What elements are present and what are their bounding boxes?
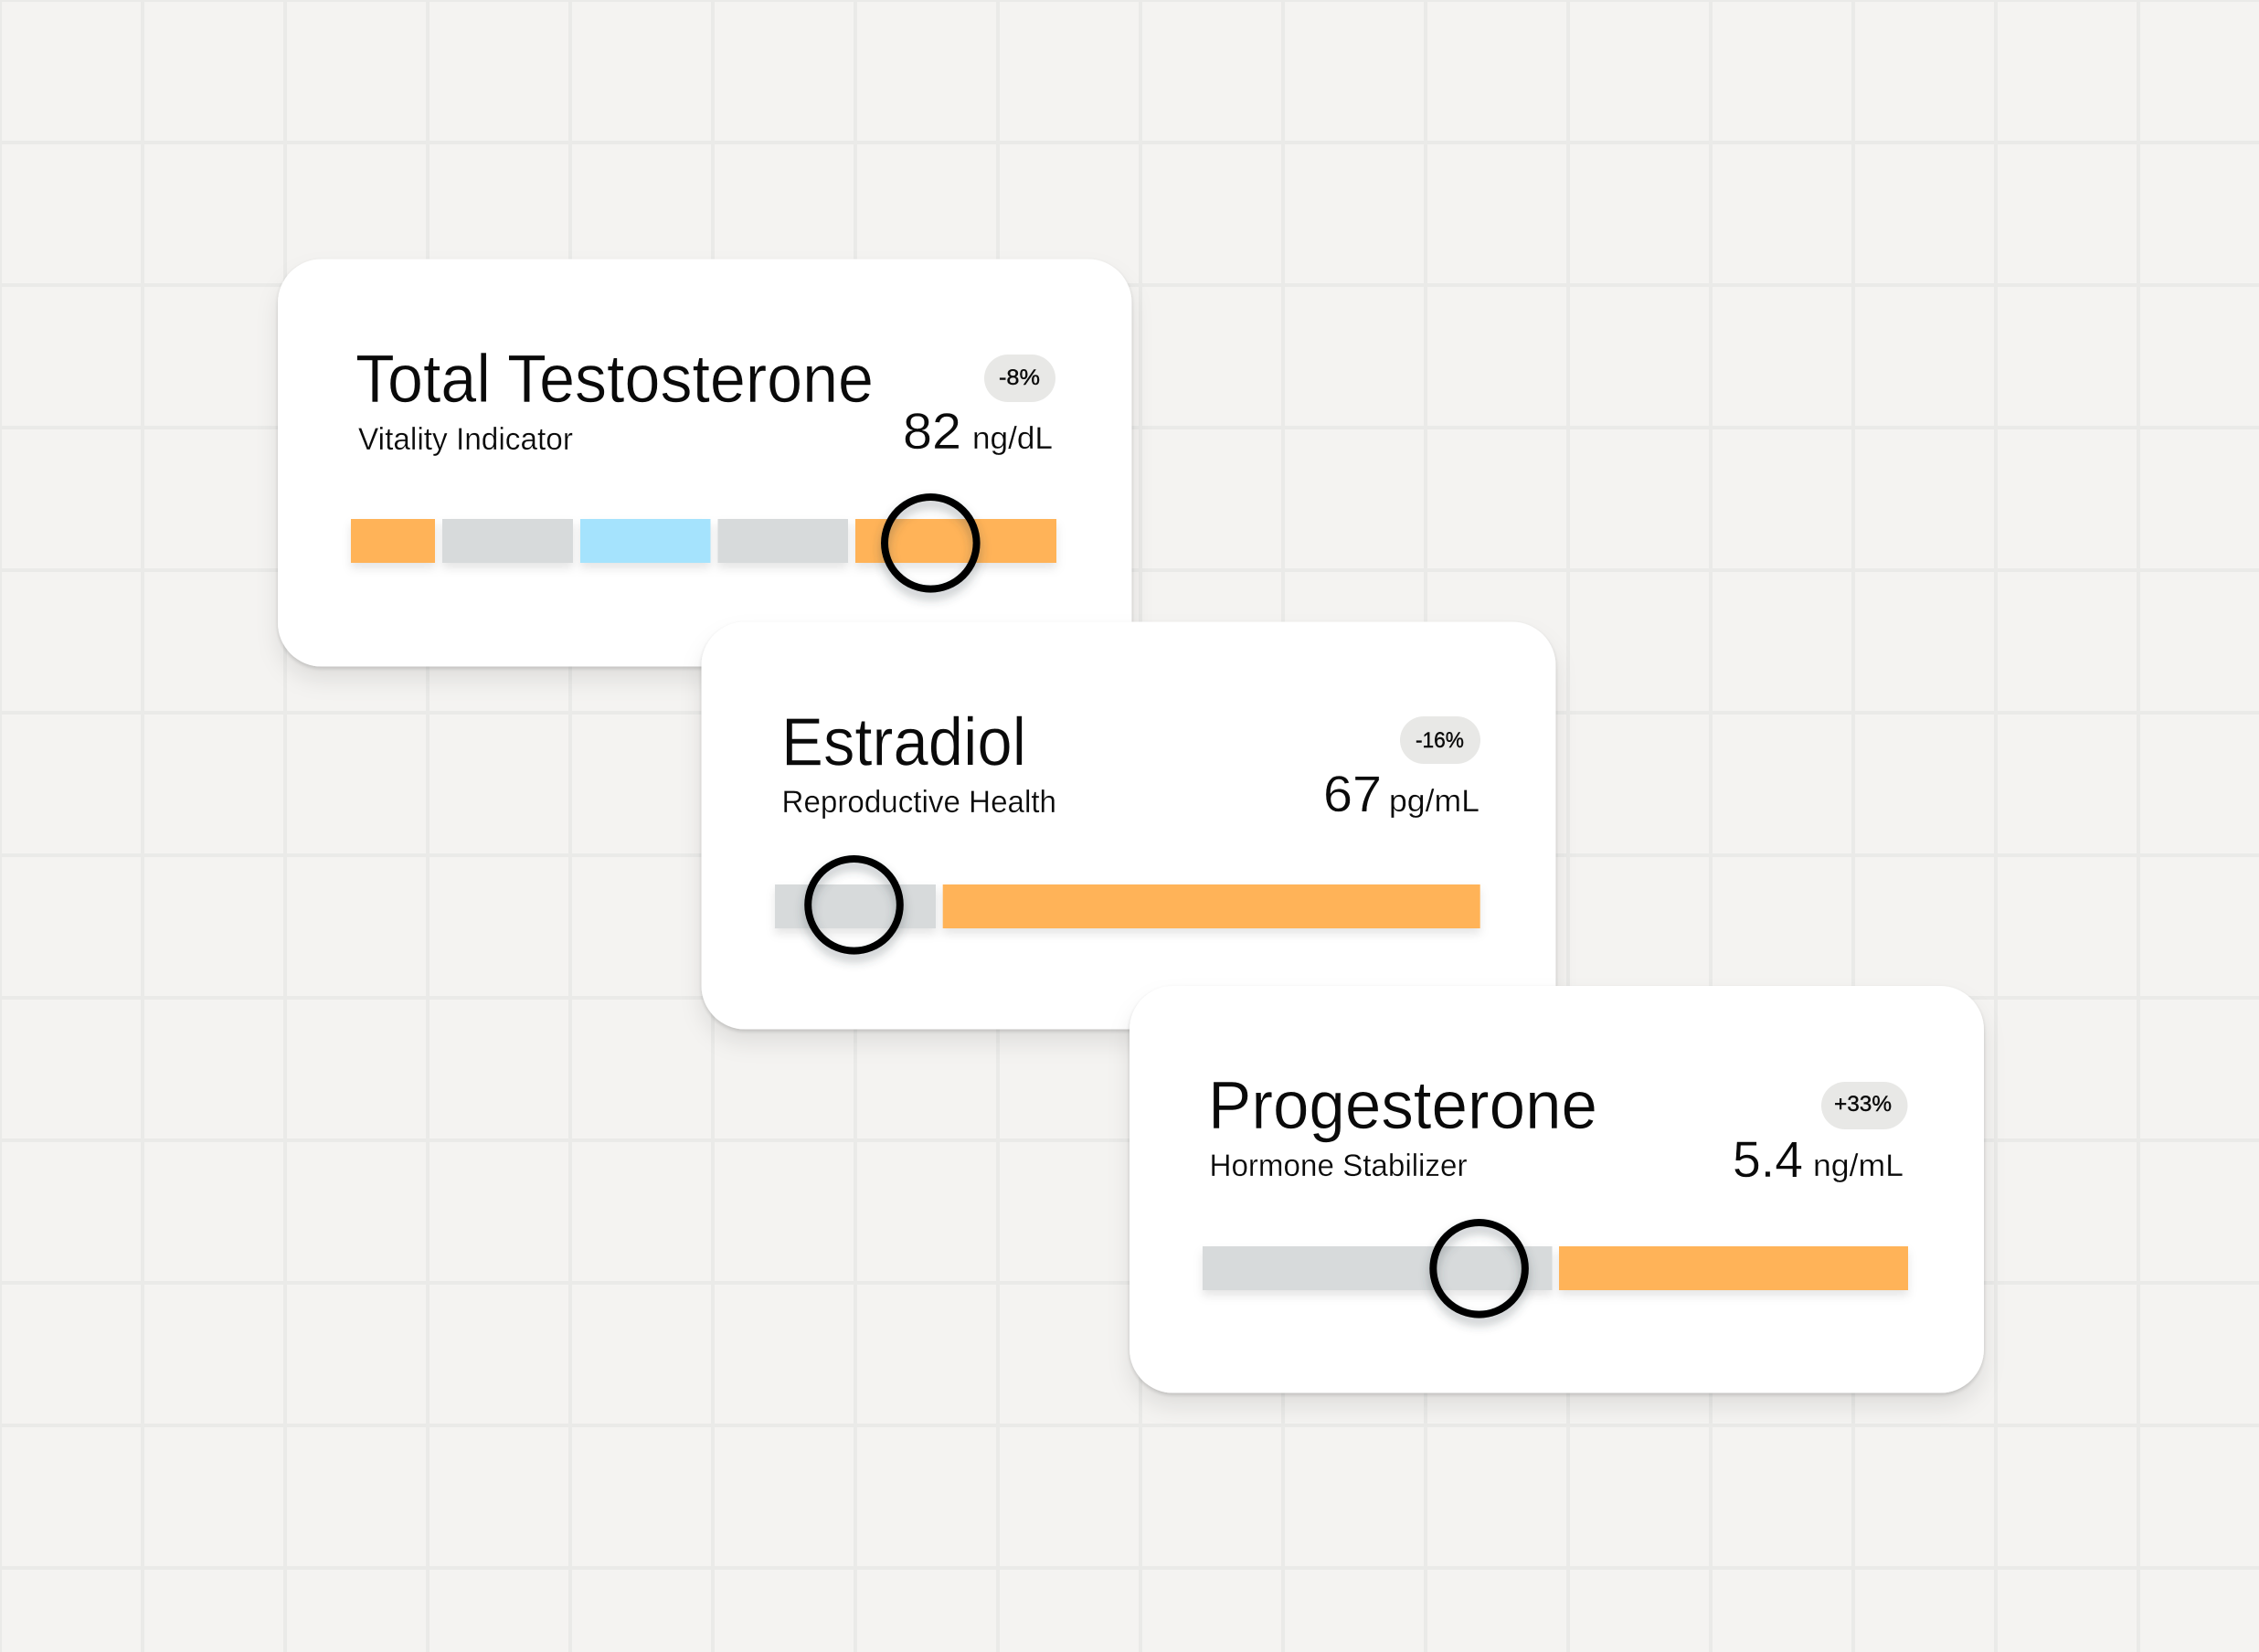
marker ring bbox=[1433, 1223, 1525, 1315]
badge: +33% bbox=[1821, 1082, 1908, 1129]
value: 67 pg/mL bbox=[1323, 765, 1479, 822]
heading: Estradiol: Estradiol bbox=[781, 704, 1026, 780]
badge: -16%: -16% bbox=[1416, 728, 1464, 753]
badge: -16% bbox=[1400, 716, 1480, 764]
value: 5.4 ng/mL bbox=[1733, 1130, 1904, 1188]
range bar: five segments bbox=[351, 519, 1056, 563]
panel: Progesterone card bbox=[1130, 986, 1984, 1393]
subtitle: Vitality Indicator: Vitality Indicator bbox=[358, 422, 573, 457]
value: 67 pg/mL: pg/mL bbox=[1389, 784, 1479, 819]
marker ring bbox=[885, 497, 977, 589]
panel: Estradiol card bbox=[702, 621, 1555, 1029]
heading: Total Testosterone: Total Testosterone bbox=[355, 341, 874, 417]
badge: -8%: -8% bbox=[999, 365, 1040, 390]
badge: +33%: +33% bbox=[1834, 1092, 1892, 1117]
range bar: two segments bbox=[1203, 1246, 1908, 1290]
range bar: two segments bbox=[775, 884, 1480, 928]
subtitle: Reproductive Health: Reproductive Health bbox=[782, 785, 1056, 820]
value: 82 ng/dL: ng/dL bbox=[972, 421, 1053, 456]
subtitle: Hormone Stabilizer: Hormone Stabilizer bbox=[1210, 1149, 1468, 1183]
badge: -8% bbox=[984, 355, 1055, 402]
value: 5.4 ng/mL: ng/mL bbox=[1813, 1149, 1904, 1183]
value: 82 ng/dL bbox=[903, 402, 1053, 460]
value: 67 pg/mL: 67 bbox=[1323, 765, 1382, 822]
value: 82 ng/dL: 82 bbox=[903, 402, 961, 460]
value: 5.4 ng/mL: 5.4 bbox=[1733, 1130, 1803, 1188]
heading: Progesterone: Progesterone bbox=[1208, 1067, 1597, 1143]
panel: Total Testosterone card bbox=[278, 259, 1131, 667]
marker ring bbox=[808, 859, 900, 951]
